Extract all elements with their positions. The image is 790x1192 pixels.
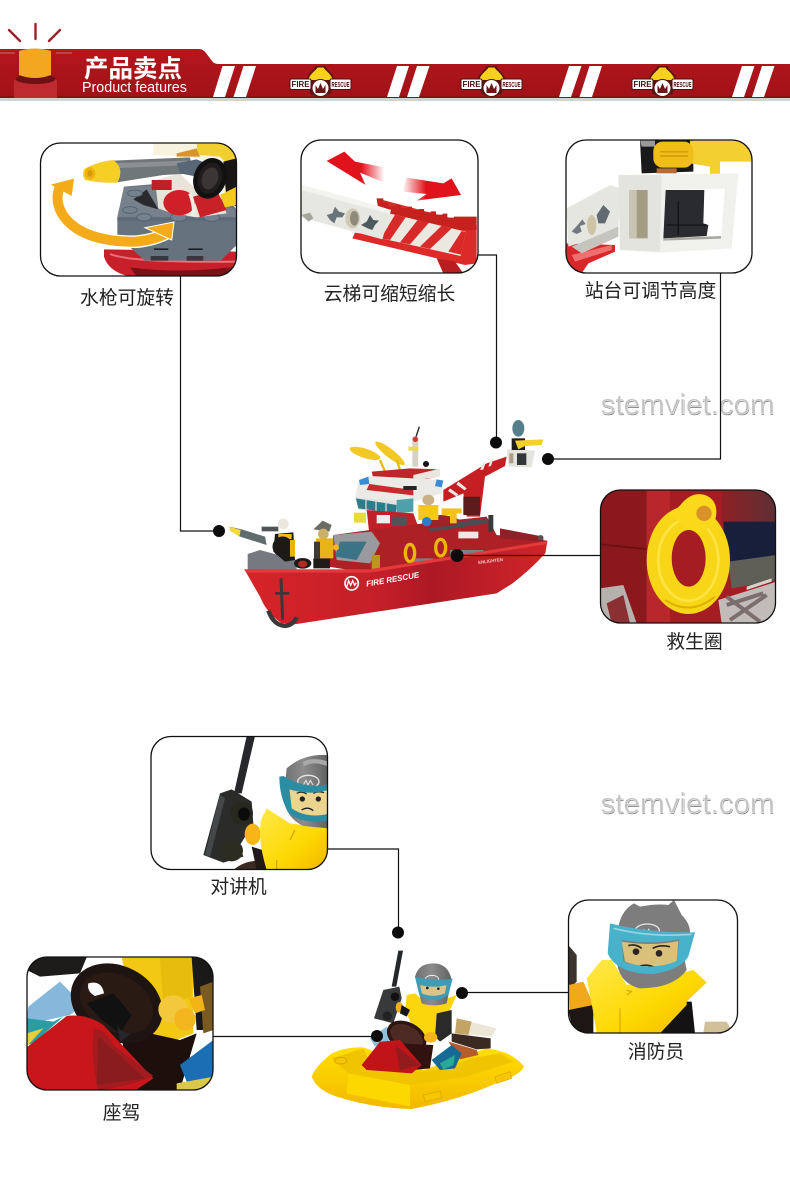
radio bbox=[374, 951, 403, 1023]
logo: fire rescue 2 bbox=[461, 66, 522, 97]
connector line: radio bbox=[327, 849, 398, 932]
panel: walkie-talkie bbox=[150, 736, 328, 870]
label: 水枪可旋转: 水枪可旋转 bbox=[80, 287, 174, 308]
label: 站台可调节高度: 站台可调节高度 bbox=[585, 280, 716, 301]
panel: driver seat bbox=[27, 954, 213, 1091]
panel: platform height adjust bbox=[565, 140, 753, 273]
heading: Product features: Product features bbox=[82, 80, 187, 96]
connector line: cannon bbox=[180, 276, 219, 531]
label: 对讲机: 对讲机 bbox=[210, 876, 267, 897]
label: 消防员: 消防员 bbox=[628, 1041, 684, 1062]
heading: 产品卖点: 产品卖点 bbox=[84, 55, 182, 83]
panel: ladder extends bbox=[300, 140, 478, 273]
watermark top: stemviet.com bbox=[601, 390, 775, 422]
fire boat model bbox=[229, 420, 547, 626]
yellow life vest bbox=[396, 993, 457, 1042]
watermark top: stemviet.com bbox=[600, 389, 774, 421]
logo: fire rescue 1 bbox=[290, 66, 351, 97]
bow cannon and firefighter bbox=[229, 519, 295, 562]
antenna mast and rotors bbox=[348, 427, 429, 472]
label: 座驾: 座驾 bbox=[103, 1102, 140, 1123]
logo: fire rescue 2: RESCUE bbox=[502, 82, 521, 89]
boat rear crane bbox=[443, 457, 507, 517]
anchor bbox=[268, 578, 297, 626]
logo: fire rescue 3 bbox=[632, 66, 693, 97]
header banner bbox=[0, 24, 790, 101]
logo: fire rescue 1: RESCUE bbox=[332, 82, 350, 89]
connector line: life ring bbox=[457, 554, 600, 556]
watermark bottom: stemviet.com bbox=[600, 788, 774, 820]
watermark bottom: stemviet.com bbox=[601, 789, 775, 821]
logo: fire rescue 3: FIRE bbox=[634, 80, 652, 89]
label: 云梯可缩短缩长: 云梯可缩短缩长 bbox=[324, 283, 455, 304]
logo: fire rescue 3: RESCUE bbox=[674, 82, 692, 89]
icon: warning beacon bbox=[0, 24, 72, 98]
connector line: seat bbox=[213, 1036, 377, 1038]
steering wheel and seat bbox=[362, 1016, 462, 1073]
hull: FIRE RESCUE bbox=[365, 570, 421, 589]
figure on platform bbox=[507, 420, 543, 467]
aft deck details bbox=[405, 515, 543, 563]
hull: ENLIGHTEN bbox=[478, 557, 503, 565]
minifigure on deck bbox=[418, 495, 462, 526]
connector line: firefighter bbox=[462, 992, 568, 994]
bridge superstructure bbox=[354, 468, 443, 540]
mid deck base bbox=[328, 517, 547, 573]
rescue dinghy model bbox=[312, 951, 524, 1109]
connector line: ladder bbox=[478, 255, 496, 442]
panel: life ring bbox=[600, 490, 777, 623]
cargo box bbox=[448, 1018, 497, 1059]
hull bbox=[244, 541, 547, 624]
raft body bbox=[312, 1047, 524, 1109]
slanted white stripes bbox=[213, 66, 774, 97]
marker dots bbox=[213, 436, 554, 1042]
label: 救生圈: 救生圈 bbox=[666, 631, 723, 652]
panel: water cannon rotates bbox=[40, 143, 237, 277]
logo: fire rescue 1: FIRE bbox=[292, 80, 310, 89]
second firefighter bbox=[313, 521, 339, 568]
logo: fire rescue 2: FIRE bbox=[462, 80, 481, 89]
panel: firefighter bbox=[568, 900, 738, 1033]
helmet and head bbox=[415, 963, 453, 1005]
connector line: platform bbox=[548, 273, 720, 459]
bow cabin and deck bbox=[248, 532, 380, 570]
